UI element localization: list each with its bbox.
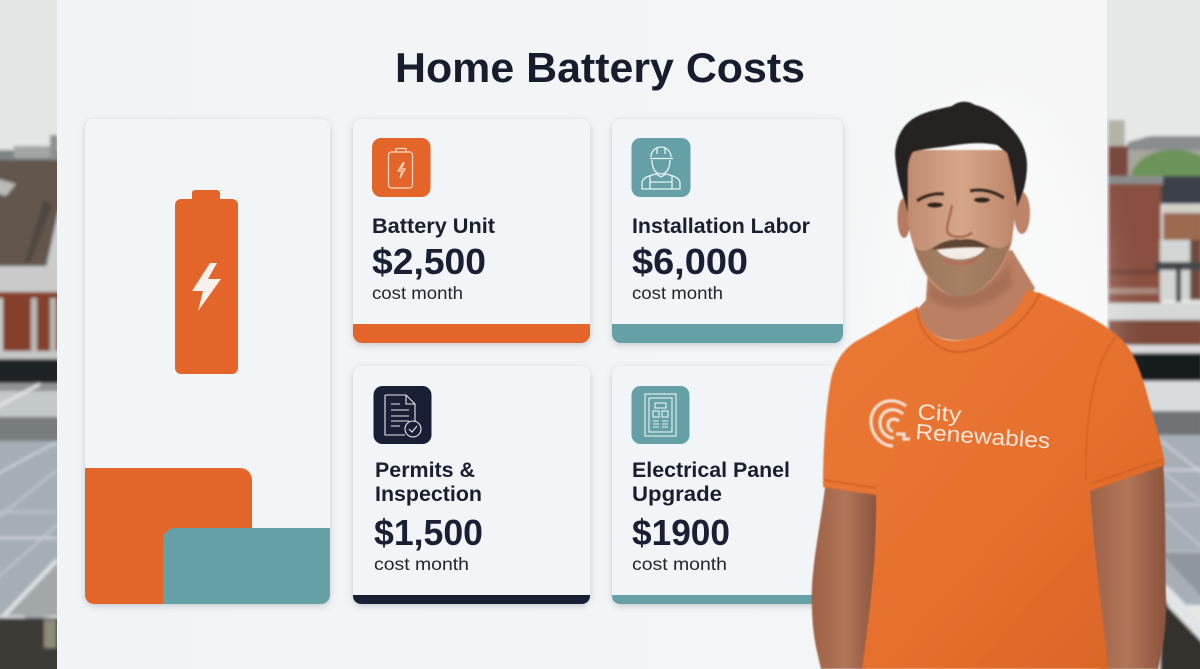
shirt logo: City Renewables [871, 399, 1051, 453]
logo mark [871, 401, 910, 446]
panel: permits and inspection [353, 366, 590, 604]
panel: installation labor [612, 119, 843, 343]
icon: battery [372, 138, 430, 197]
icon: large battery [175, 190, 238, 374]
panel: battery illustration [85, 119, 330, 604]
icon: document [374, 386, 432, 444]
label: Electrical Panel [632, 459, 790, 482]
colour bar [353, 324, 590, 343]
colour bar [612, 595, 842, 604]
arms [812, 460, 1166, 669]
icon: worker [632, 138, 690, 197]
shirt logo: City Renewables: Renewables [915, 419, 1051, 453]
photo background: left rooftop strip [0, 0, 57, 669]
label: Installation Labor [632, 215, 810, 238]
nose [947, 205, 972, 237]
teal accent block [163, 528, 330, 604]
neck [915, 250, 1035, 341]
panel: electrical panel upgrade: Upgrade [632, 483, 722, 506]
panel: battery unit [353, 119, 590, 343]
caption: cost month [374, 554, 469, 574]
colour bar [612, 324, 843, 343]
label: Permits & [375, 459, 475, 482]
head [895, 102, 1030, 297]
panel: permits and inspection: Inspection [375, 483, 482, 506]
orange accent block [85, 468, 252, 604]
moustache [932, 239, 990, 250]
shirt logo: City Renewables: City [917, 399, 962, 427]
value: $2,500 [372, 241, 486, 282]
panel: electrical panel upgrade [612, 366, 842, 604]
stubble [914, 240, 1011, 297]
t-shirt [823, 290, 1165, 669]
person in orange City Renewables shirt [812, 102, 1166, 669]
caption: cost month [372, 283, 463, 303]
hair [895, 102, 1027, 213]
soft glow behind person [860, 90, 1110, 630]
icon: breaker panel [632, 386, 690, 444]
photo background: right rooftop strip [1100, 0, 1200, 669]
label: Battery Unit [372, 215, 495, 238]
lower lip [944, 257, 978, 264]
title: Home Battery Costs [395, 44, 805, 91]
caption: cost month [632, 283, 723, 303]
caption: cost month [632, 554, 727, 574]
colour bar [353, 595, 590, 604]
smile [937, 248, 985, 259]
value: $6,000 [632, 241, 748, 282]
ears [898, 198, 910, 238]
value: $1900 [632, 512, 730, 553]
value: $1,500 [374, 512, 483, 553]
face [907, 150, 1015, 296]
neck shadow [929, 262, 1012, 308]
eyes and brows [917, 194, 944, 201]
